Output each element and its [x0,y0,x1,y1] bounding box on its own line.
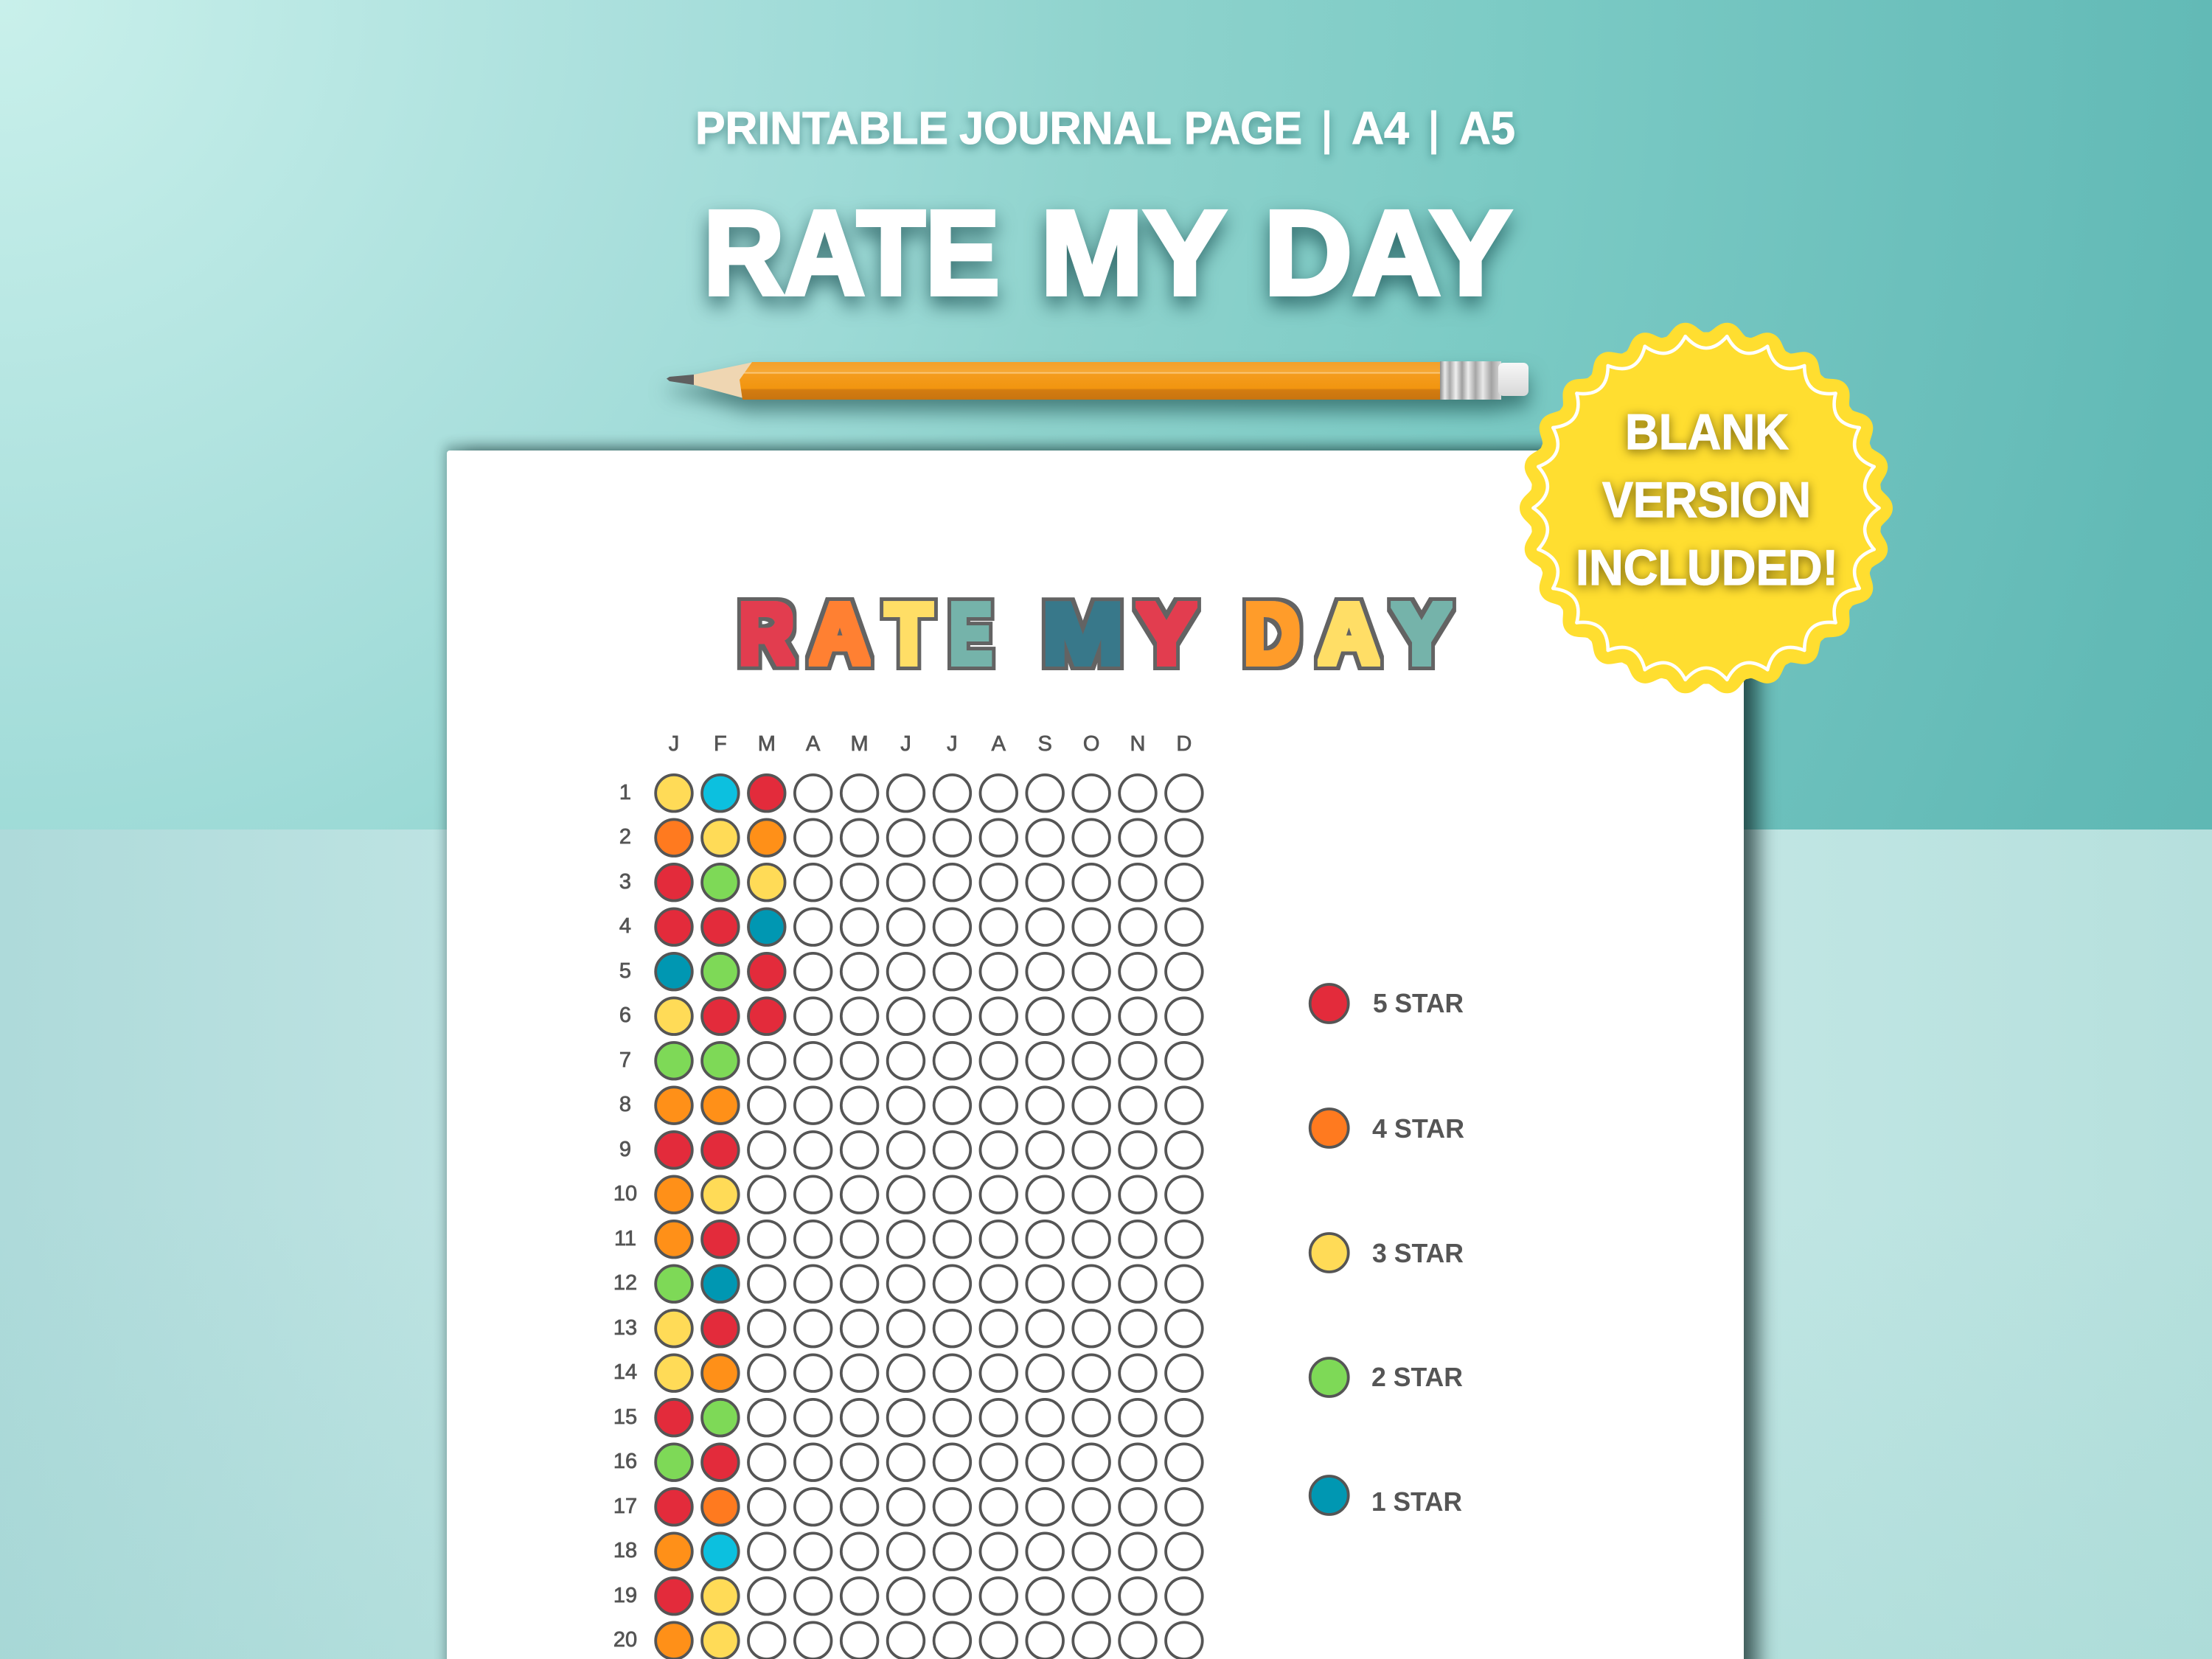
subtitle: PAGE [1184,103,1302,154]
month labels: F [714,732,727,756]
legend [1310,984,1464,1517]
background: upper teal wall [0,0,2212,830]
month labels: S [1038,732,1052,756]
day number labels: 5 [619,959,631,983]
day number labels [613,781,637,1652]
legend: 1 STAR [1371,1486,1462,1517]
page heading: coloured outlined letters: Y [1392,585,1451,681]
month labels: J [669,732,679,756]
title: MY [1040,185,1226,320]
badge: blank version included: INCLUDED! [1576,540,1838,596]
day number labels: 19 [613,1584,637,1607]
subtitle: PRINTABLE [695,103,948,154]
page heading: coloured outlined letters [739,585,1451,681]
day number labels: 17 [613,1495,637,1518]
day number labels: 2 [619,825,631,849]
month labels [669,732,1192,756]
badge: blank version included: VERSION [1602,472,1811,528]
page heading: coloured outlined letters: A [810,585,870,681]
month labels: M [758,732,776,756]
page heading: coloured outlined letters: T [886,585,932,681]
day number labels: 18 [613,1539,637,1562]
day number labels: 10 [613,1182,637,1206]
legend: 3 STAR [1372,1238,1464,1268]
month labels: A [992,732,1006,756]
subtitle: JOURNAL [959,103,1172,154]
subtitle: | [1322,103,1332,155]
month labels: N [1130,732,1145,756]
day number labels: 6 [619,1004,631,1027]
subtitle: A4 [1352,103,1410,154]
title: RATE [703,185,1000,320]
subtitle: | [1429,103,1439,155]
page heading: coloured outlined letters: A [1318,585,1379,681]
month labels: A [806,732,821,756]
day number labels: 1 [619,781,631,804]
day number labels: 15 [613,1405,637,1429]
page heading: coloured outlined letters: E [950,585,991,681]
month labels: J [947,732,958,756]
rating grid [655,775,1203,1659]
day number labels: 12 [613,1271,637,1295]
month labels: D [1176,732,1192,756]
day number labels: 16 [613,1450,637,1473]
day number labels: 7 [619,1048,631,1072]
day number labels: 8 [619,1093,631,1116]
day number labels: 3 [619,870,631,894]
day number labels: 9 [619,1138,631,1161]
page heading: coloured outlined letters: M [1043,585,1124,681]
badge: blank version included [1520,320,1893,696]
month labels: M [851,732,869,756]
day number labels: 4 [619,914,631,938]
day number labels: 20 [613,1628,637,1652]
panel: journal page sheet [447,451,1744,1659]
subtitle: A5 [1459,103,1515,154]
day number labels: 14 [613,1360,637,1384]
day number labels: 11 [614,1227,636,1251]
legend: 2 STAR [1371,1362,1463,1392]
subtitle [695,103,1515,155]
badge: blank version included: BLANK [1625,404,1789,460]
title [703,185,1512,320]
day number labels: 13 [613,1316,637,1340]
background: lower pale surface [0,830,2212,1659]
legend: 5 STAR [1373,988,1464,1018]
page heading: coloured outlined letters: R [739,585,793,681]
legend: 4 STAR [1372,1113,1464,1144]
page heading: coloured outlined letters: D [1245,585,1299,681]
icon: pencil [667,361,1528,400]
title: DAY [1264,185,1512,320]
month labels: O [1083,732,1099,756]
month labels: J [900,732,911,756]
page heading: coloured outlined letters: Y [1137,585,1196,681]
